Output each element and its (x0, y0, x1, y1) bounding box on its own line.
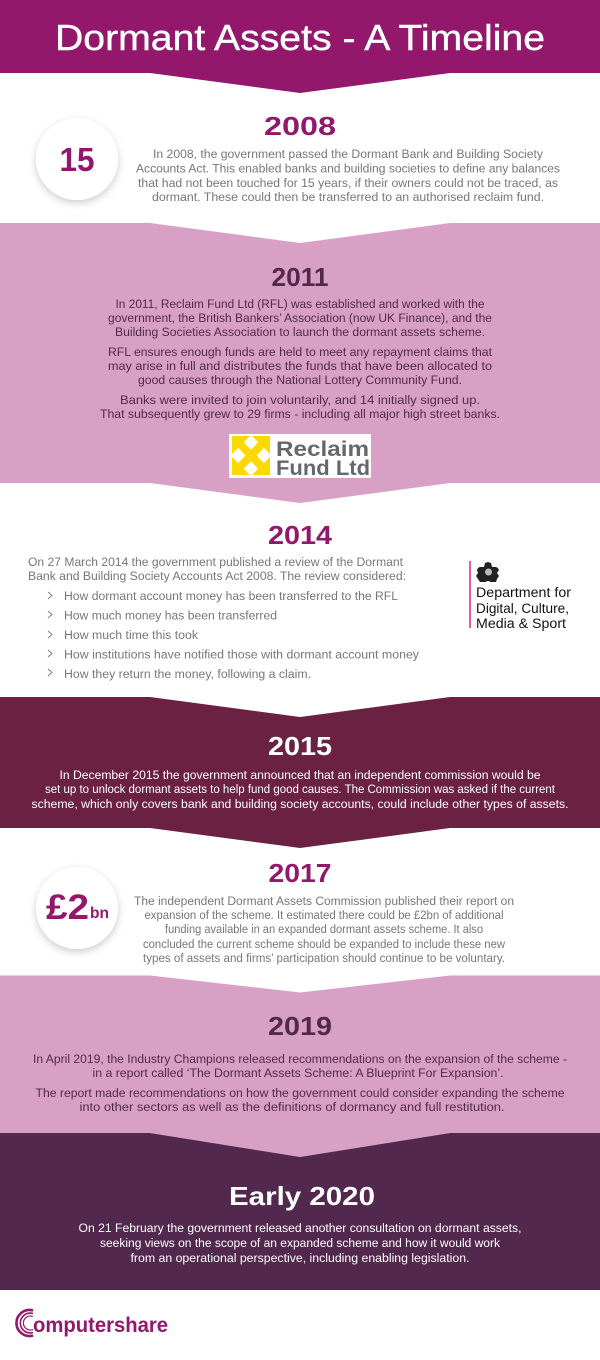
text: 2015 description: set up to unlock dormant assets to help fund good causes. The Commission was asked if the current (45, 782, 556, 796)
logo: Department for Digital, Culture, Media & Sport: Digital, Culture, (476, 601, 569, 616)
icon: £2bn circle: £2 (46, 888, 89, 927)
heading: 2015: 2015 (268, 731, 332, 761)
title: Dormant Assets - A Timeline (55, 17, 545, 58)
list: review points: How they return the money, following a claim. (64, 667, 311, 681)
panel: 2017 (36, 858, 514, 965)
icon: 15 years circle (36, 118, 118, 200)
heading: 2017: 2017 (268, 858, 332, 888)
text: 2008 description: In 2008, the government passed the Dormant Bank and Building Society (153, 147, 544, 161)
logo: Computershare: omputershare (33, 1314, 168, 1337)
text: 2014 intro (28, 555, 406, 583)
panel: 2008 (36, 111, 560, 204)
panel: title banner (0, 0, 600, 93)
list: review points: How much money has been transferred (64, 608, 277, 622)
heading: 2008: 2008 (264, 111, 336, 141)
logo: Department for Digital, Culture, Media & Sport: Media & Sport (476, 616, 566, 631)
logo: Department for Digital, Culture, Media & Sport (469, 561, 572, 631)
text: 2015 description: scheme, which only covers bank and building society accounts, could include other types of assets. (32, 797, 568, 811)
text: 2019 description: into other sectors as well as the definitions of dormancy and full restitution. (80, 1100, 504, 1114)
icon: 15 years circle: 15 (60, 141, 94, 178)
text: 2014 intro: On 27 March 2014 the government published a review of the Dormant (28, 555, 404, 569)
text: 2008 description: that had not been touched for 15 years, if their owners could not be traced, as (138, 176, 558, 190)
text: 2011 description (100, 297, 500, 421)
text: Early 2020 description: seeking views on the scope of an expanded scheme and how it would work (100, 1236, 501, 1250)
text: 2011 description: Building Societies Association to launch the dormant assets scheme. (115, 325, 485, 339)
text: 2011 description: That subsequently grew to 29 firms - including all major high street banks. (100, 407, 500, 421)
logo: Department for Digital, Culture, Media & Sport: Department for (476, 585, 572, 600)
heading: 2011: 2011 (272, 262, 328, 292)
text: 2017 description: funding available in an expanded dormant assets scheme. It also (165, 922, 483, 936)
panel: 2019 (0, 976, 600, 1157)
text: 2015 description (32, 768, 568, 811)
text: 2008 description: dormant. These could then be transferred to an authorised reclaim fund. (152, 190, 544, 204)
panel: Early 2020 (0, 1133, 600, 1290)
text: 2019 description: In April 2019, the Industry Champions released recommendations on the expansion of the scheme - (33, 1052, 567, 1066)
text: 2017 description: concluded the current scheme should be expanded to include these new (143, 937, 505, 951)
text: 2015 description: In December 2015 the government announced that an independent commission would be (60, 768, 541, 782)
logo: Reclaim Fund Ltd: Fund Ltd (276, 457, 370, 480)
list: review points: How dormant account money has been transferred to the RFL (64, 589, 398, 603)
text: 2011 description: RFL ensures enough funds are held to meet any repayment claims that (108, 345, 493, 359)
icon: £2bn circle (36, 867, 118, 949)
list: review points: How institutions have notified those with dormant account money (64, 648, 420, 662)
text: 2019 description: The report made recommendations on how the government could consider expanding the scheme (36, 1086, 565, 1100)
panel: 2014 (28, 520, 572, 681)
text: Early 2020 description: On 21 February the government released another consultation on dormant assets, (78, 1221, 522, 1235)
logo: Reclaim Fund Ltd: Reclaim (276, 438, 369, 461)
text: 2011 description: good causes through the National Lottery Community Fund. (138, 373, 462, 387)
text: 2017 description (134, 894, 514, 965)
panel: 2015 (0, 697, 600, 848)
logo: Reclaim Fund Ltd (229, 434, 371, 480)
icon: £2bn circle: bn (90, 905, 109, 922)
text: 2011 description: Banks were invited to join voluntarily, and 14 initially signed up. (120, 393, 480, 407)
text: 2019 description (33, 1052, 567, 1114)
heading: 2014: 2014 (268, 520, 333, 550)
text: 2017 description: The independent Dormant Assets Commission published their report on (134, 894, 514, 908)
text: 2014 intro: Bank and Building Society Accounts Act 2008. The review considered: (28, 569, 406, 583)
text: Early 2020 description (78, 1221, 522, 1265)
text: 2008 description (136, 147, 560, 204)
heading: Early 2020: Early 2020 (229, 1181, 375, 1211)
list: review points: How much time this took (64, 628, 199, 642)
text: 2011 description: may arise in full and distributes the funds that have been allocated to (108, 359, 492, 373)
text: Early 2020 description: from an operational perspective, including enabling legislation. (130, 1251, 470, 1265)
heading: 2019: 2019 (268, 1011, 332, 1041)
text: 2017 description: expansion of the scheme. It estimated there could be £2bn of additional (144, 908, 504, 922)
text: 2008 description: Accounts Act. This enabled banks and building societies to define any balances (136, 162, 560, 176)
text: 2011 description: In 2011, Reclaim Fund Ltd (RFL) was established and worked with the (116, 297, 485, 311)
text: 2019 description: in a report called ‘The Dormant Assets Scheme: A Blueprint For Expansion’. (92, 1066, 504, 1080)
panel: 2011 (0, 223, 600, 503)
text: 2017 description: types of assets and firms’ participation should continue to be voluntary. (143, 951, 505, 965)
list: review points (48, 589, 420, 681)
text: 2011 description: government, the British Bankers’ Association (now UK Finance), and the (108, 311, 492, 325)
